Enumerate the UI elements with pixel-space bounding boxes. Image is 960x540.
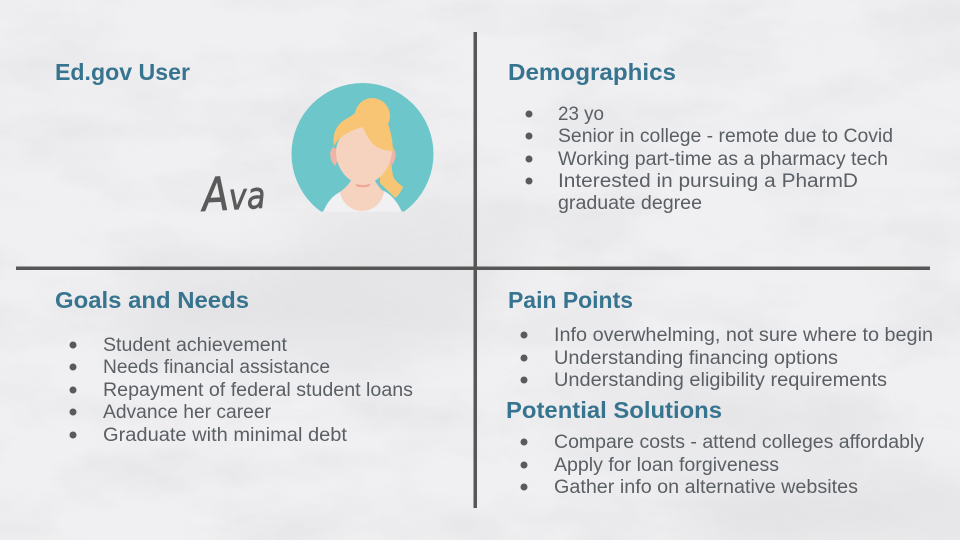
neck shadow [355,184,371,187]
shirt [323,191,402,212]
panel: potential solutions [506,397,925,498]
face [336,125,392,184]
list: goals: Graduate with minimal debt [103,425,348,446]
list: potential solutions: Apply for loan forgiveness [554,455,779,476]
list: demographics: 23 yo [558,104,604,125]
panel: pain points [508,287,933,391]
list: potential solutions: Gather info on alternative websites [554,477,858,498]
panel: goals and needs [55,287,413,446]
list: goals: Student achievement [103,335,288,356]
list: pain points [520,325,933,391]
name: Ava: Ava [198,165,266,222]
list: goals [70,335,413,446]
heading: Goals and Needs: Goals and Needs [55,287,249,313]
ears [330,147,396,166]
list: demographics: graduate degree [558,193,702,214]
neck [340,178,384,211]
list: demographics: Working part-time as a pharmacy tech [558,149,888,170]
heading: Potential Solutions: Potential Solutions [506,397,722,423]
heading: Ed.gov User: Ed.gov User [55,59,190,85]
panel: user [56,63,434,212]
list: pain points: Understanding financing options [554,348,838,369]
list: potential solutions [520,432,925,498]
vertical divider [474,32,477,508]
list: pain points: Info overwhelming, not sure where to begin [554,325,933,346]
list: demographics: Senior in college - remote due to Covid [558,126,893,147]
list: demographics: Interested in pursuing a PharmD [558,171,858,192]
hair [333,98,393,151]
list: demographics [526,104,893,214]
heading: Demographics: Demographics [508,59,676,85]
list: potential solutions: Compare costs - attend colleges affordably [554,432,925,453]
list: goals: Advance her career [103,402,272,423]
list: goals: Repayment of federal student loans [103,380,413,401]
list: pain points: Understanding eligibility requirements [554,370,887,391]
heading: Pain Points: Pain Points [508,287,633,313]
hair ponytail [380,160,403,198]
icon: Ava avatar [292,83,434,225]
panel: demographics [508,59,893,214]
list: goals: Needs financial assistance [103,357,330,378]
horizontal divider [16,266,930,270]
